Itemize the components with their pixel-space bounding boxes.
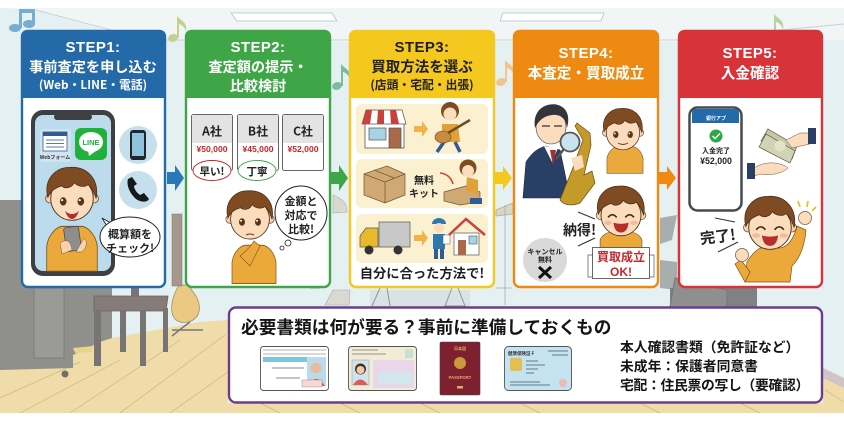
badge: fast (193, 160, 231, 180)
heading: step3: STEP3: (395, 39, 449, 56)
card: B社: B社 (248, 122, 268, 140)
card: A社: ¥50,000 (196, 144, 228, 154)
text: required document list: 宅配：住民票の写し（要確認） (620, 374, 809, 394)
icon: web form: Webフォーム (40, 154, 70, 161)
badge: polite (238, 160, 276, 180)
heading: step3 (370, 39, 474, 93)
heading: step2: 比較検討 (230, 76, 286, 96)
card: C社: C社 (293, 122, 313, 140)
thought bubble: compare: 比較! (288, 221, 314, 237)
exclamation: satisfied: 納得! (563, 220, 596, 240)
boy thinking (226, 191, 276, 284)
heading: step5 (721, 45, 780, 83)
callout: check estimate: 概算額を (108, 226, 152, 242)
panel: STEP3 (349, 30, 495, 287)
row: delivery kit: 無料 (414, 172, 434, 187)
text: required document list (620, 336, 809, 394)
boy with sign: 買取成立 (597, 248, 645, 265)
boy with sign: OK! (610, 265, 632, 279)
heading: step3: 買取方法を選ぶ (371, 56, 473, 77)
icon: passport: 日本国 (454, 345, 466, 352)
panel: STEP5 (678, 30, 823, 287)
heading: step4: 本査定・買取成立 (528, 62, 644, 83)
exclamation: done: 完了! (699, 224, 737, 249)
panel: STEP2 (185, 30, 331, 287)
row: delivery kit (356, 159, 488, 208)
heading: step1: STEP1: (66, 39, 120, 56)
panel: STEP1 (21, 30, 166, 287)
text: required document list: 本人確認書類（免許証など） (620, 336, 799, 356)
icon: cash handover (747, 128, 816, 179)
heading: documents: 必要書類は何が要る？事前に準備しておくもの (241, 314, 611, 340)
icon: bank app phone: 入金完了 (702, 146, 730, 156)
arrow: step2 to step3 (331, 165, 348, 191)
icon: telephone (119, 171, 157, 209)
arrow: step4 to step5 (658, 166, 676, 190)
badge: free cancellation: キャンセル (528, 247, 562, 257)
icon: bank app phone: 銀行アプ (706, 115, 726, 122)
card: B社 (238, 114, 278, 170)
heading: step3: (店頭・宅配・出張) (370, 76, 474, 93)
icon: my number card (348, 346, 416, 390)
arrow: step3 to step4 (495, 166, 512, 190)
appraiser with saxophone (523, 104, 595, 205)
icon: health insurance card: 健康保険証 F (508, 350, 535, 357)
thought bubble: compare: 金額と (284, 193, 318, 209)
card: A社: A社 (201, 122, 222, 140)
icon: health insurance card (504, 346, 572, 390)
heading: step1 (29, 39, 157, 93)
boy celebrating (735, 196, 816, 282)
text: required document list: 未成年：保護者同意書 (620, 355, 758, 375)
icon: passport: PASSPORT (449, 375, 472, 380)
row: delivery kit: キット (409, 185, 439, 200)
decorative notes (9, 9, 783, 91)
arrow: step1 to step2 (167, 165, 184, 191)
card: C社 (282, 114, 324, 170)
panel: STEP4 (513, 30, 659, 287)
panel: required documents (229, 308, 822, 402)
badge: polite: 丁寧 (246, 164, 268, 179)
white top strip (0, 0, 844, 8)
boy with sign (588, 186, 654, 279)
exclamation: satisfied (563, 212, 596, 246)
heading: step4 (528, 45, 644, 83)
heading: step2 (208, 39, 308, 96)
heading: step4: STEP4: (559, 45, 613, 62)
thought bubble: compare (275, 186, 327, 250)
callout: check estimate (100, 217, 160, 257)
icon: web form (40, 129, 71, 162)
row: home pickup (356, 214, 488, 263)
icon: smartphone with boy (31, 110, 115, 276)
boy watching (602, 108, 644, 173)
callout: check estimate: チェック! (106, 240, 154, 256)
card: C社: ¥52,000 (287, 144, 319, 154)
badge: free cancellation: 無料 (538, 255, 552, 265)
icon: bank app phone (690, 108, 742, 210)
badge: fast: 早い! (200, 164, 224, 179)
card: B社: ¥45,000 (242, 144, 274, 154)
icon: LINE (75, 128, 107, 160)
caption: choose method: 自分に合った方法で! (360, 263, 484, 282)
icon: passport (440, 342, 480, 395)
row: store visit (356, 102, 488, 154)
heading: step2: 査定額の提示・ (208, 57, 308, 77)
icon: driver licence (260, 346, 328, 390)
icon: mobile phone (119, 126, 157, 164)
heading: step5: 入金確認 (721, 62, 780, 83)
icon: bank app phone: ¥52,000 (700, 156, 732, 166)
heading: step5: STEP5: (723, 45, 777, 62)
icon: LINE: LINE (82, 138, 100, 147)
heading: step1: 事前査定を申し込む (29, 57, 157, 77)
thought bubble: compare: 対応で (284, 207, 318, 223)
badge: free cancellation (523, 238, 567, 282)
card: A社 (192, 114, 232, 170)
heading: step2: STEP2: (231, 39, 285, 56)
heading: step1: (Web・LINE・電話) (39, 76, 147, 93)
